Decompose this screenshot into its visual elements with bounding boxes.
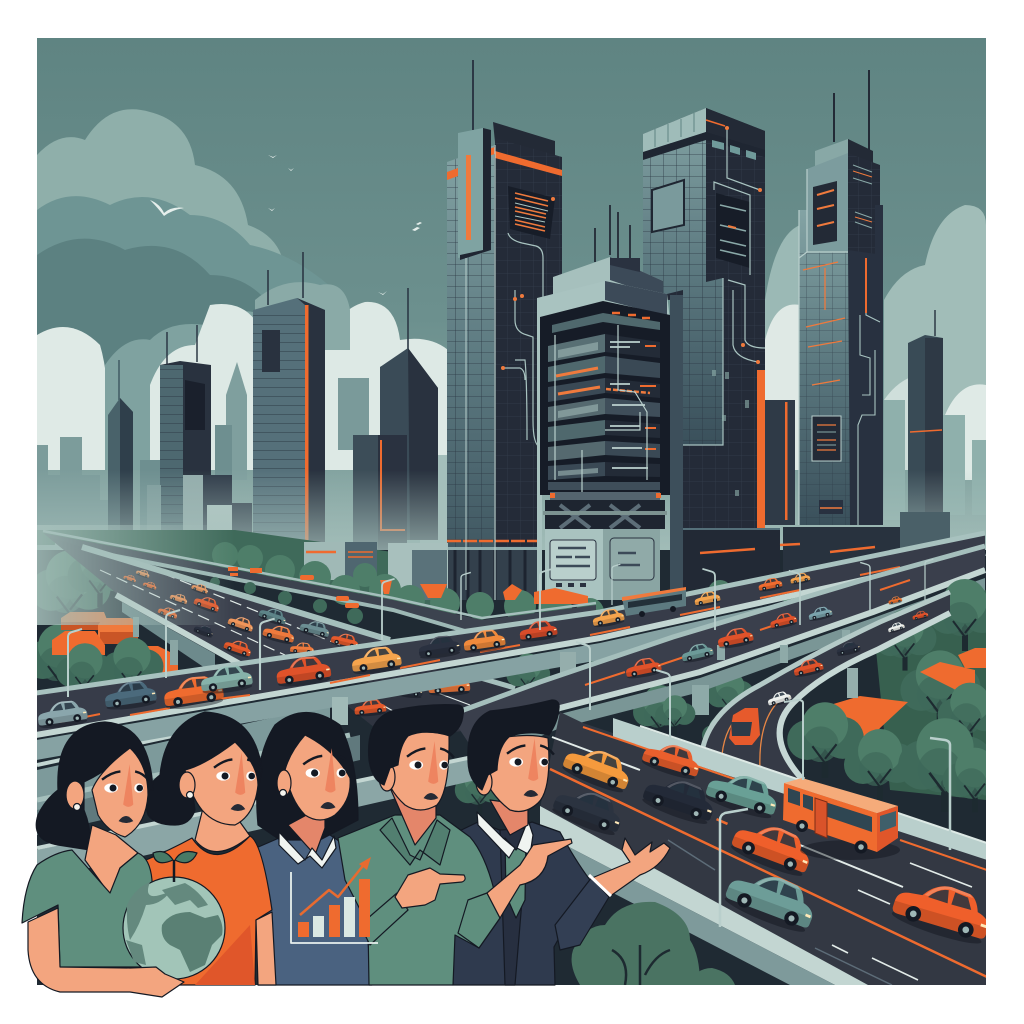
person 4: man in green shirt [338, 705, 572, 985]
road: far highway [43, 531, 596, 632]
road: diagonal highway [48, 537, 390, 668]
screen panel [716, 193, 750, 268]
far skyline [37, 362, 986, 550]
birds [150, 155, 422, 295]
screen panel [508, 186, 555, 239]
tree ground band [37, 530, 450, 612]
tower B [643, 108, 795, 589]
clouds [37, 109, 986, 480]
tower C [780, 70, 950, 575]
truss [543, 492, 667, 529]
pointing hand: left [360, 868, 465, 945]
low building with orange frame [353, 435, 407, 550]
horizon haze [37, 476, 986, 550]
light annex [388, 543, 448, 600]
right trees [655, 579, 1008, 812]
trees between far roads [210, 577, 363, 624]
person 2: woman in orange shirt [146, 712, 276, 985]
short block [147, 475, 252, 532]
traffic on main deck [36, 571, 933, 730]
base [545, 529, 660, 600]
mid trees [455, 643, 754, 815]
person 5: man in suit [451, 700, 670, 985]
traffic on foreground highway [550, 737, 997, 949]
tower: orange stripe [253, 252, 325, 550]
tower: dark left [160, 325, 211, 545]
orange roofs right [958, 648, 986, 668]
arm and pointing hand: right [458, 839, 572, 948]
tower A [447, 60, 562, 600]
road: curved ramp [703, 590, 950, 780]
mid skyline towers [108, 252, 943, 550]
central data tower [537, 205, 683, 600]
dark ground [37, 550, 986, 985]
orange treetops [380, 580, 588, 604]
tower: far left [108, 360, 133, 530]
sprout [153, 852, 197, 882]
tower: far right [908, 310, 943, 515]
road: second right deck [450, 546, 985, 762]
wall: bottom [540, 806, 868, 985]
open hand [589, 838, 670, 897]
sky [37, 38, 986, 598]
small cars [123, 568, 360, 659]
ramp van [729, 708, 760, 745]
road: lower left deck [37, 700, 530, 880]
street lamps [68, 559, 950, 927]
road: foreground highway [540, 712, 997, 985]
foreground tree [572, 902, 735, 985]
far road haze [37, 525, 235, 625]
bus: upper deck [622, 587, 686, 617]
globe [123, 877, 225, 979]
circuit lines [503, 233, 543, 447]
person 1: woman with globe [22, 722, 225, 997]
growth chart [291, 857, 378, 943]
pillars [692, 630, 850, 715]
distant tree band [212, 542, 801, 626]
tower: behind right [380, 288, 438, 540]
left trees and orange buildings [37, 543, 178, 686]
bus [783, 778, 900, 860]
orange roofs [61, 612, 108, 630]
circuit lines [683, 128, 765, 445]
wall: top [613, 718, 987, 860]
low block [304, 542, 377, 580]
arm and hand [28, 908, 184, 997]
lane markings [583, 727, 740, 781]
people group [22, 700, 670, 997]
road: main deck [36, 533, 985, 760]
road: under deck [348, 670, 516, 732]
screen panels [813, 165, 872, 245]
server floors [548, 334, 660, 490]
person 3: woman in navy sweater [256, 712, 372, 985]
